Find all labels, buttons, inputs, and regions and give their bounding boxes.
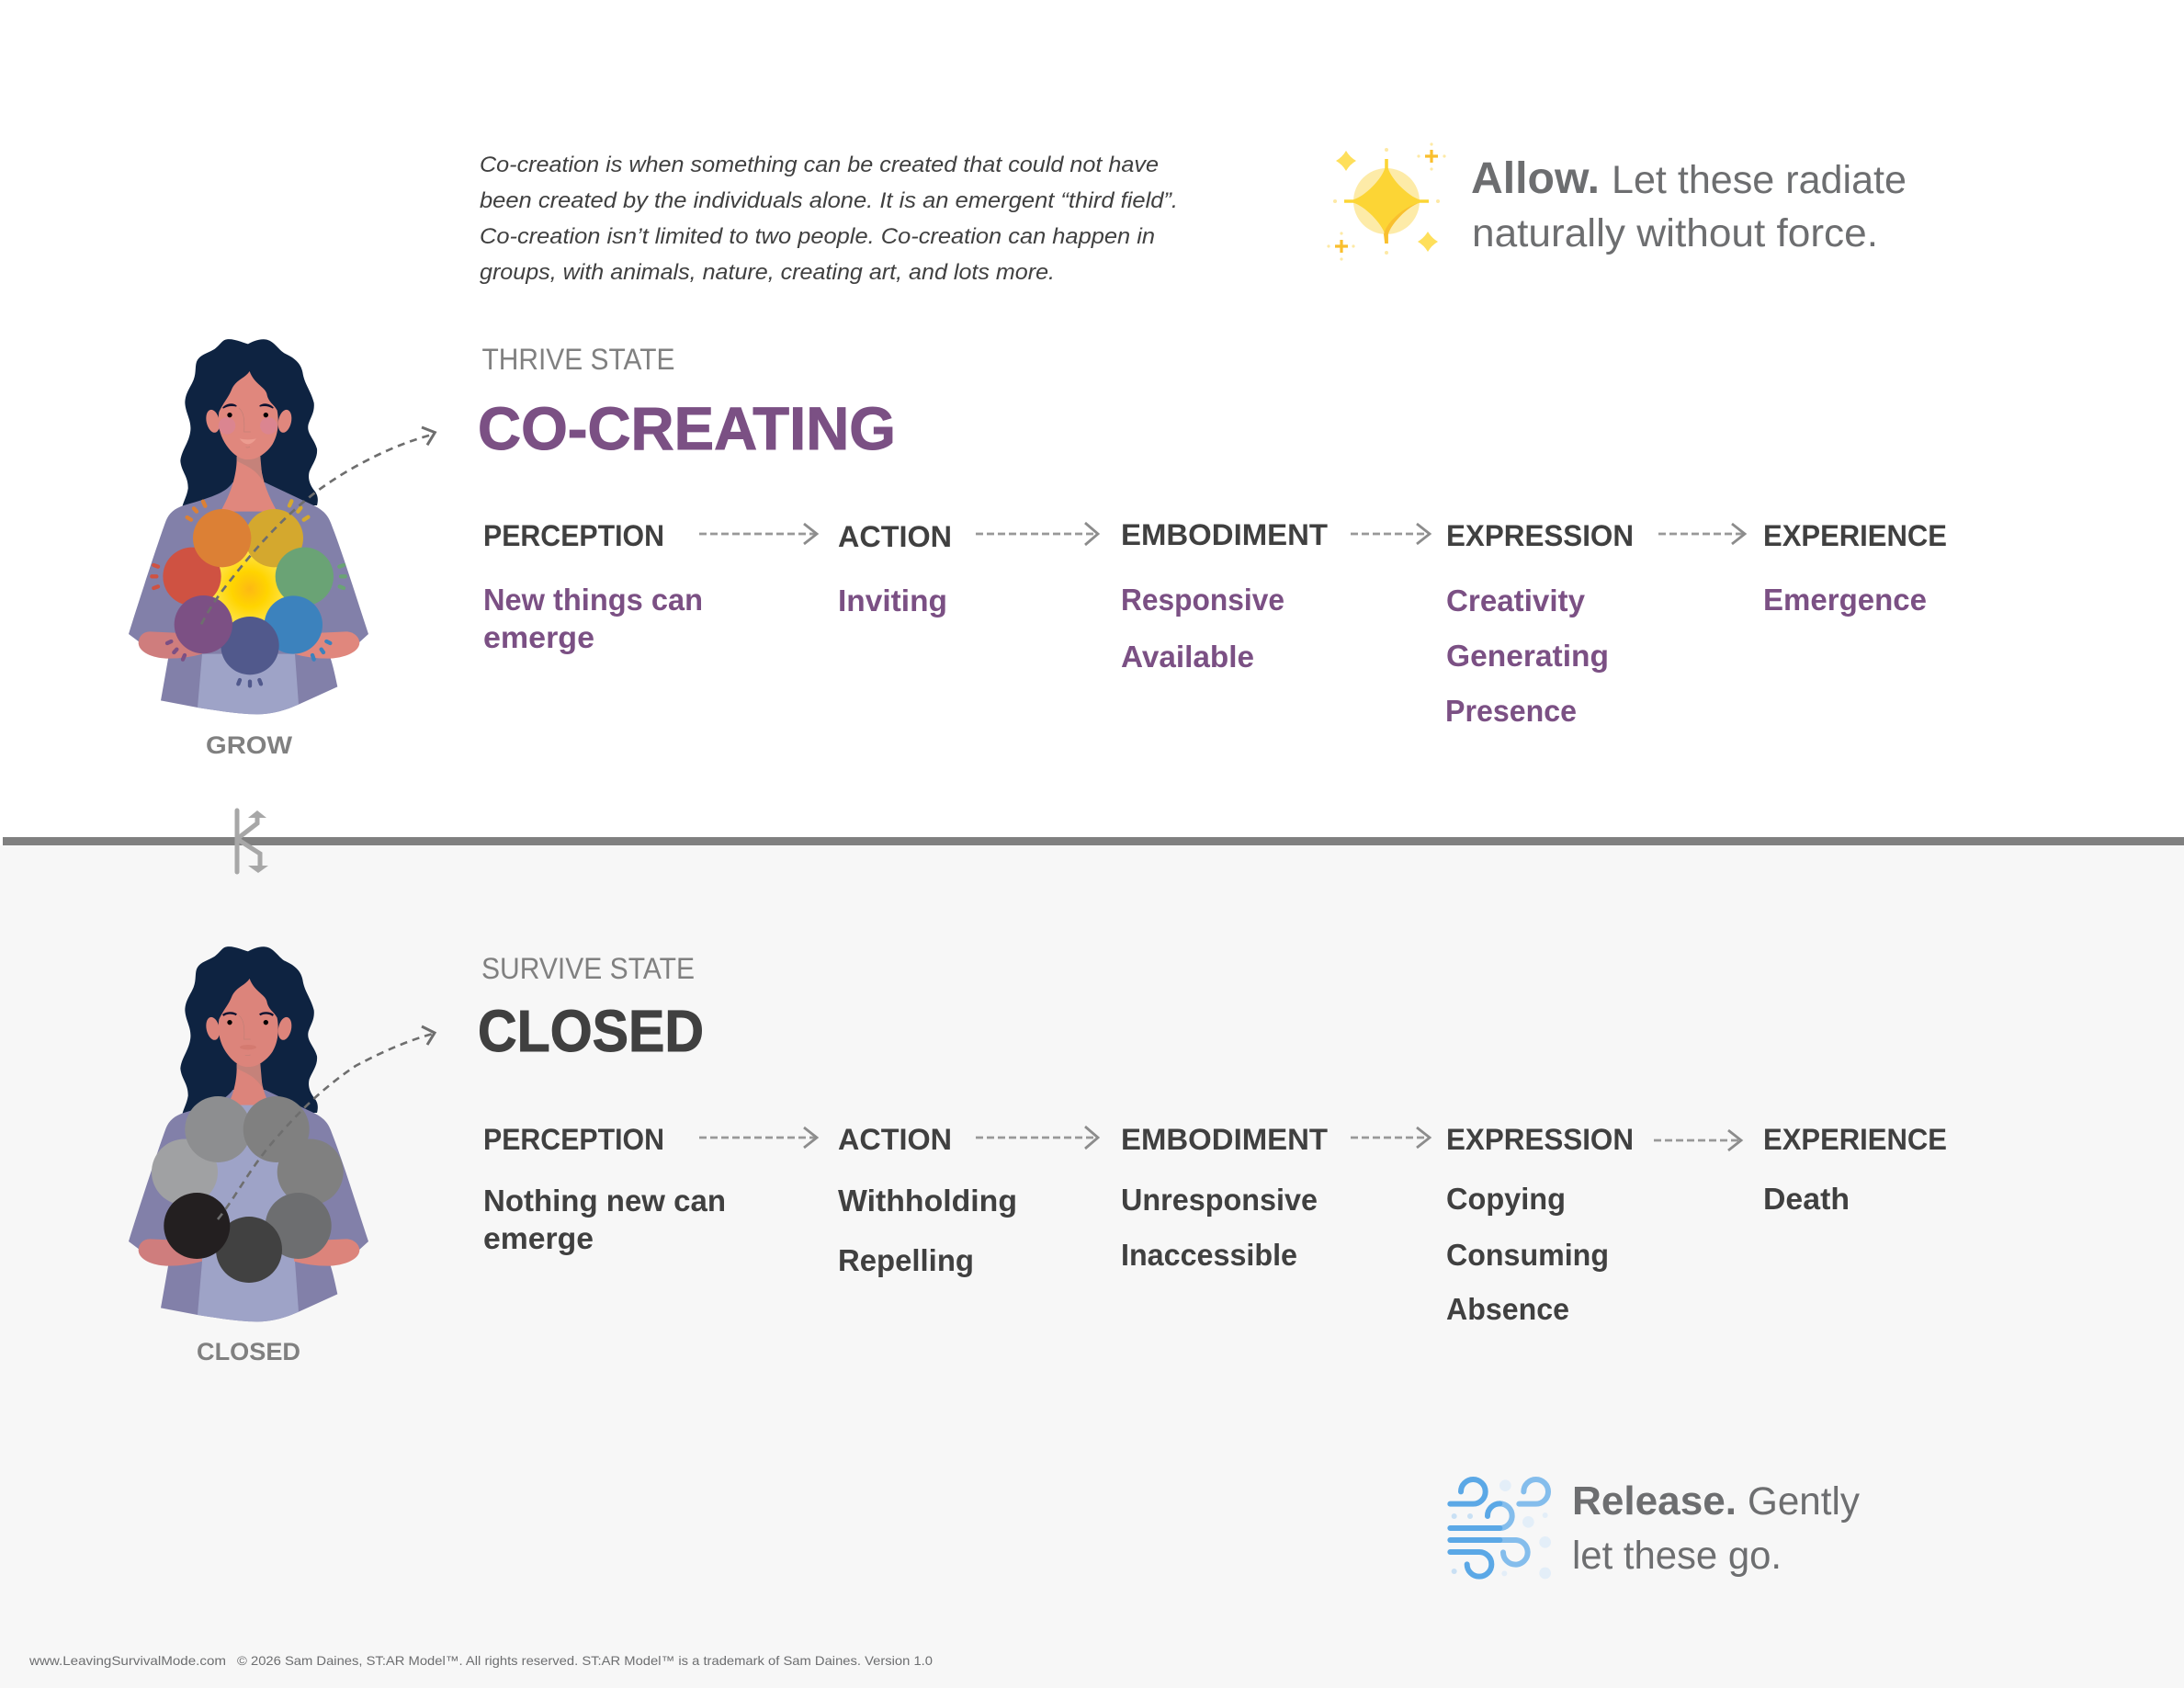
survive flow values: Death (1763, 1182, 1850, 1216)
ears (204, 408, 221, 434)
dashed arrow (201, 427, 435, 624)
thrive flow headings (483, 518, 1947, 553)
thrive flow headings: ACTION (838, 520, 952, 553)
callout: release: Gently (1748, 1479, 1860, 1524)
icon: state transition arrows (237, 810, 268, 873)
thrive flow headings: EXPRESSION (1446, 519, 1634, 552)
intro text block (480, 153, 1178, 285)
hair (180, 946, 318, 1115)
intro text block: groups, with animals, nature, creating art, and lots more. (480, 260, 1055, 285)
thrive flow values: New things can (483, 583, 703, 617)
survive flow headings (483, 1123, 1947, 1156)
ears (204, 1015, 221, 1041)
title: co-creating: CO-CREATING (478, 394, 896, 462)
icon: sparkle (1327, 142, 1446, 261)
cheeks (219, 417, 277, 435)
footer credit: www.LeavingSurvivalMode.com (28, 1653, 226, 1668)
colored circles (163, 509, 334, 674)
thrive flow values: emerge (483, 620, 594, 654)
survive flow values (483, 1182, 1850, 1326)
jacket (129, 482, 368, 714)
thrive flow values: Emergence (1763, 583, 1927, 617)
thrive flow values: Generating (1446, 639, 1609, 673)
callout: allow: naturally without force. (1472, 211, 1878, 255)
face (219, 371, 278, 459)
survive flow values: Unresponsive (1121, 1183, 1318, 1217)
survive flow headings: EXPRESSION (1446, 1123, 1634, 1156)
hair (180, 339, 318, 507)
survive flow headings: EXPERIENCE (1763, 1123, 1947, 1156)
thrive flow headings: EXPERIENCE (1763, 519, 1947, 552)
survive flow values: Consuming (1446, 1238, 1609, 1272)
survive flow values: Inaccessible (1121, 1238, 1297, 1272)
figure label: closed: CLOSED (197, 1338, 300, 1365)
survive flow values: emerge (483, 1221, 594, 1255)
survive flow values: Nothing new can (483, 1184, 726, 1218)
thrive flow values: Inviting (838, 583, 947, 617)
survive flow headings: PERCEPTION (483, 1123, 664, 1156)
survive flow values: Copying (1446, 1182, 1566, 1216)
thrive flow values: Available (1121, 640, 1254, 674)
arms (139, 1239, 202, 1266)
arms (139, 631, 202, 659)
face (219, 979, 278, 1067)
survive flow values: Withholding (838, 1184, 1017, 1218)
callout: allow (1471, 154, 1907, 255)
thrive flow arrows (699, 523, 1745, 545)
callout: allow: Allow. (1471, 154, 1600, 203)
thrive flow headings: PERCEPTION (483, 519, 664, 552)
jacket (129, 1090, 368, 1321)
eyes and brows (223, 404, 273, 447)
thrive flow headings: EMBODIMENT (1121, 518, 1328, 551)
callout: release: let these go. (1572, 1534, 1782, 1578)
inner shirt panel (198, 654, 299, 714)
intro text block: been created by the individuals alone. It is an emergent “third field”. (480, 188, 1178, 213)
survive flow arrows (699, 1127, 1741, 1150)
icon: wind (1450, 1479, 1551, 1579)
thrive flow values: Creativity (1446, 583, 1586, 617)
survive flow values: Absence (1446, 1292, 1569, 1326)
thrive flow values: Presence (1445, 694, 1577, 728)
inner shirt panel (187, 1101, 312, 1321)
figure label: grow: GROW (206, 731, 293, 759)
callout: release (1572, 1478, 1860, 1578)
intro text block: Co-creation is when something can be created that could not have (480, 153, 1159, 177)
dashed arrow: closed (218, 1026, 435, 1219)
sun core (209, 549, 289, 629)
thrive flow values (483, 583, 1927, 728)
neck (221, 457, 277, 512)
heading: thrive state: THRIVE STATE (481, 343, 674, 376)
eyes and mouth (223, 1013, 273, 1056)
footer credit: © 2026 Sam Daines, ST:AR Model™. All rights reserved. ST:AR Model™ is a trademark of Sam Daines. Version 1.0 (237, 1653, 933, 1668)
gray and black circles (152, 1096, 344, 1283)
thrive flow values: Responsive (1121, 583, 1284, 617)
intro text block: Co-creation isn’t limited to two people. Co-creation can happen in (480, 224, 1155, 249)
survive flow headings: ACTION (838, 1123, 952, 1156)
title: closed: CLOSED (478, 998, 704, 1064)
callout: allow: Let these radiate (1612, 158, 1907, 202)
figure: closed person with gray circles (129, 946, 368, 1321)
neck (228, 1064, 269, 1105)
radiating ticks (152, 501, 345, 685)
callout: release: Release. (1572, 1478, 1737, 1524)
figure: grow person with colored circles (129, 339, 435, 714)
survive flow headings: EMBODIMENT (1121, 1123, 1328, 1156)
heading: survive state: SURVIVE STATE (481, 952, 695, 985)
survive flow values: Repelling (838, 1243, 974, 1277)
